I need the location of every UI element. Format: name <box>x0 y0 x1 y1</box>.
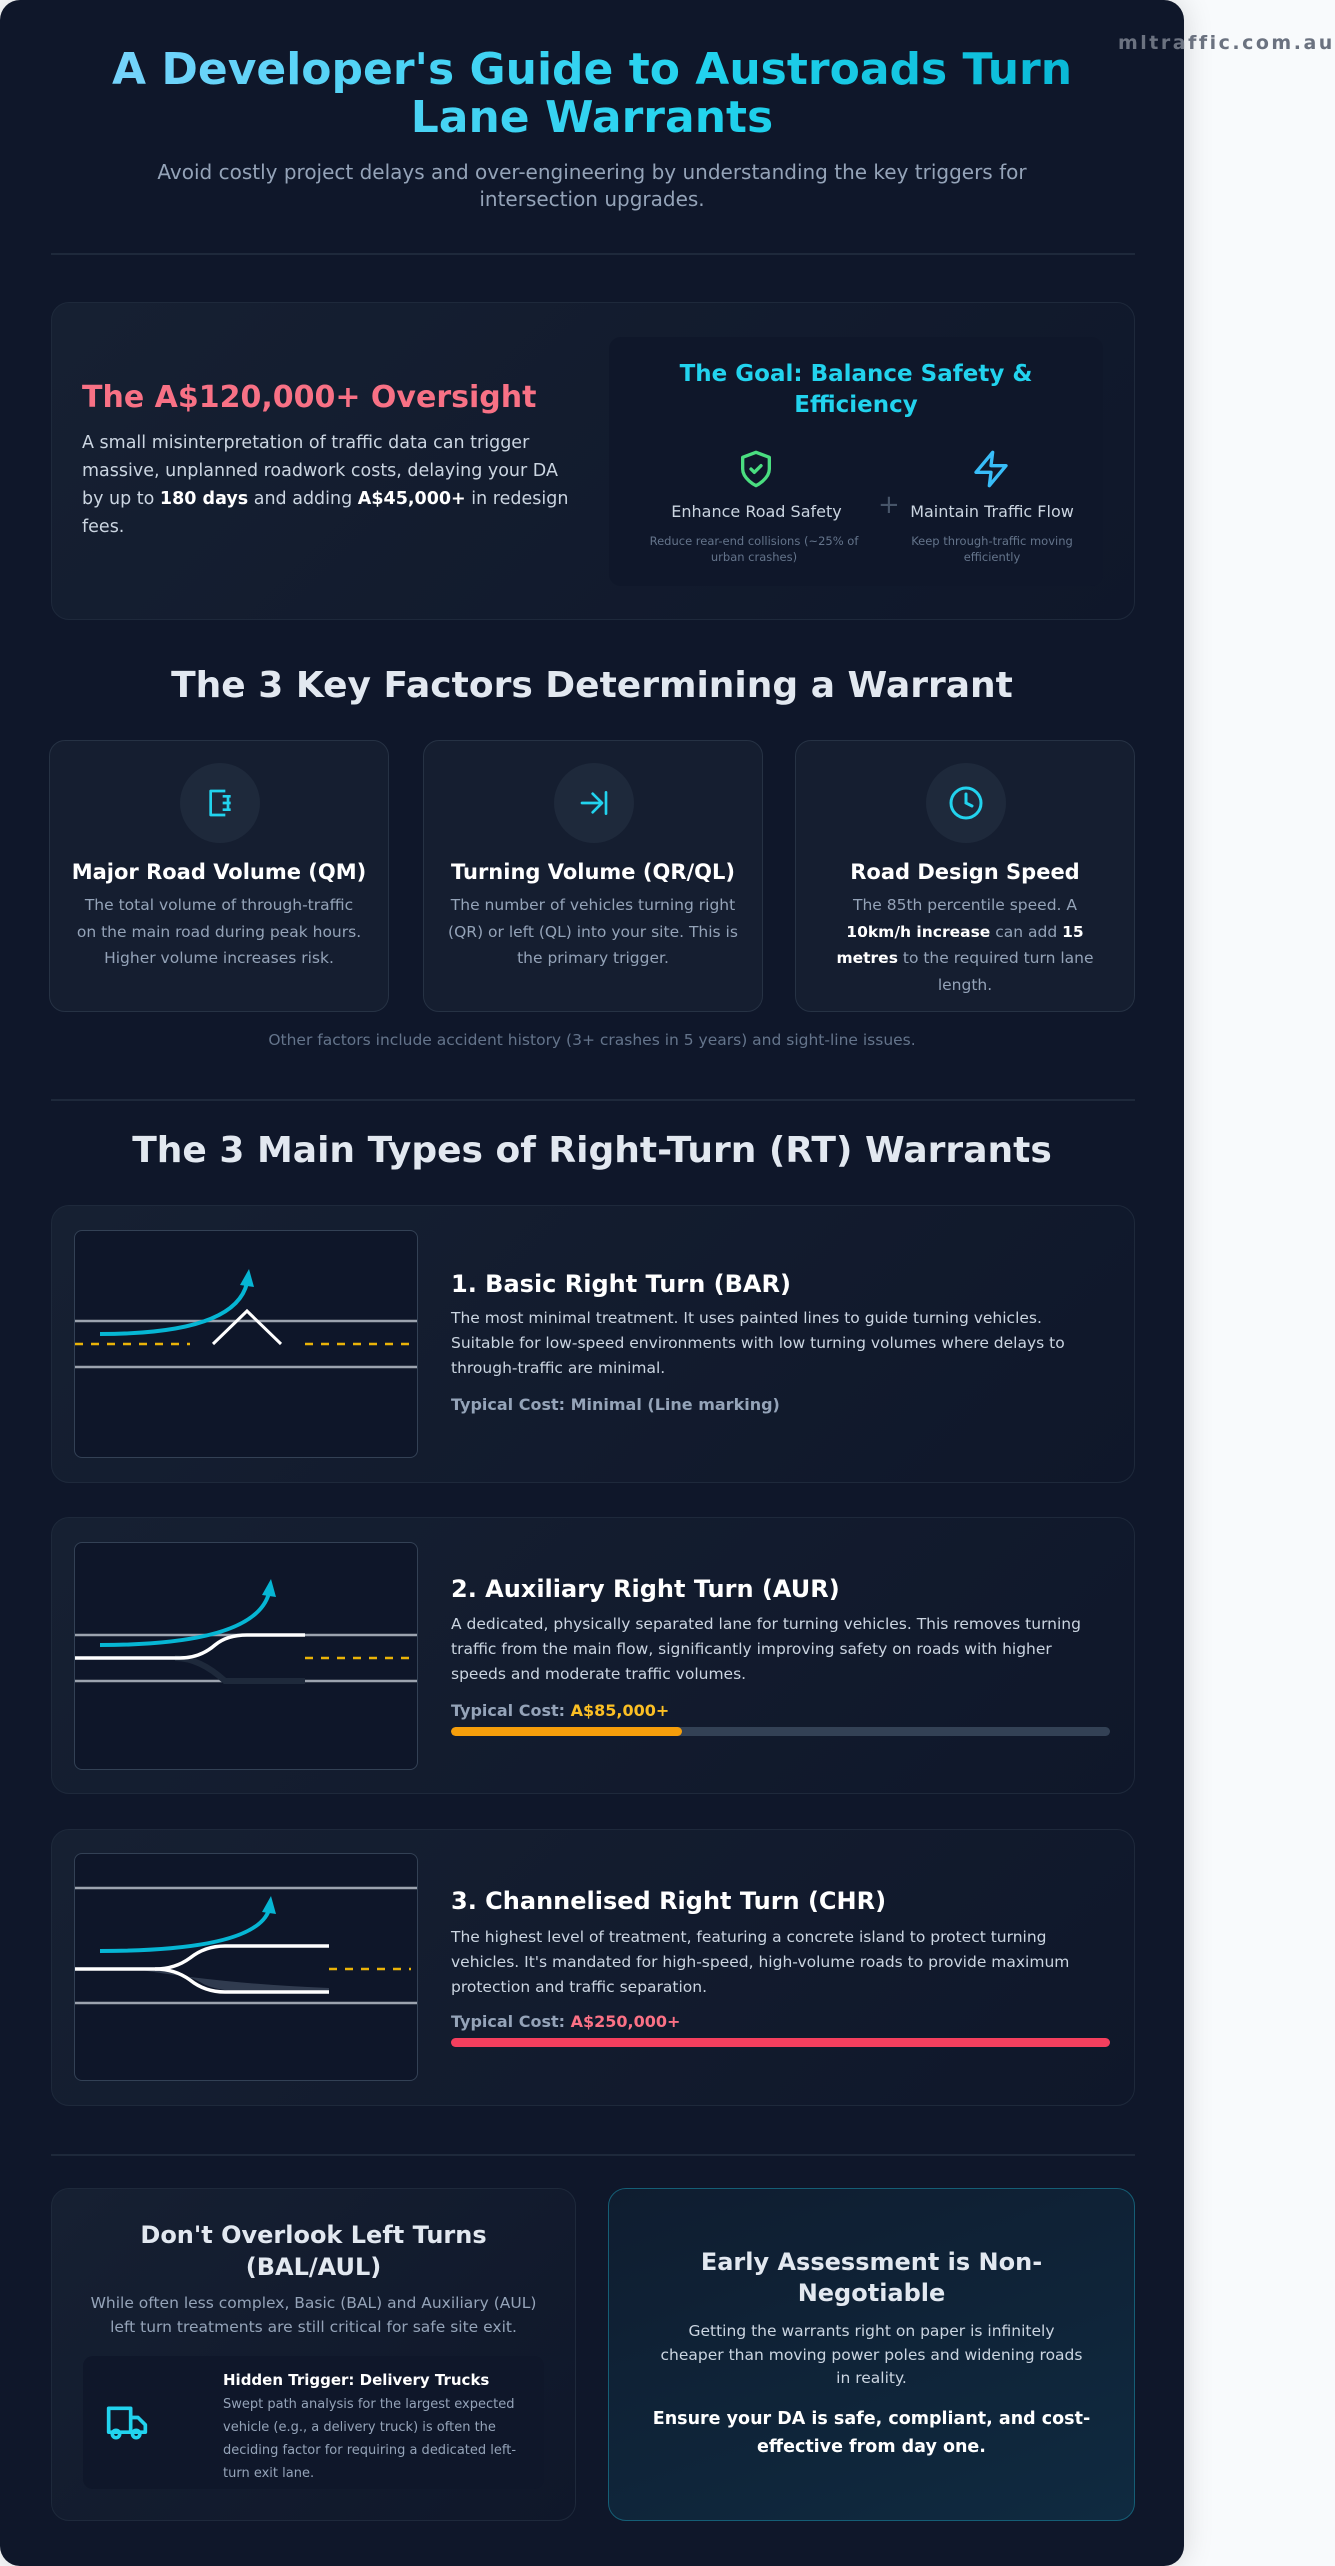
plus: + <box>878 490 900 520</box>
factor card: design speed: The 85th percentile speed. A 10km/h increase can add 15 metres to the required turn lane length. <box>836 896 1094 994</box>
panel: BAR <box>51 1205 1135 1483</box>
call to action: Ensure your DA is safe, compliant, and cost-effective from day one. <box>653 2409 1090 2457</box>
icon: bolt <box>974 450 1008 488</box>
main card: The most minimal treatment. It uses painted lines to guide turning vehicles. Suitable for low-speed environments with low turning volumes where delays to through-traffic are minimal. <box>451 1309 1065 1377</box>
goal heading: Efficiency <box>794 392 918 418</box>
factor card: turning volume: The number of vehicles turning right (QR) or left (QL) into your site. This is the primary trigger. <box>448 896 738 967</box>
diagram: AUR <box>74 1542 418 1770</box>
note: Other factors include accident history (3+ crashes in 5 years) and sight-line issues. <box>268 1031 916 1049</box>
assessment heading: Negotiable <box>798 2279 945 2307</box>
flow note: Keep through-traffic moving efficiently <box>911 534 1073 564</box>
heading: key factors: The 3 Key Factors Determining a Warrant <box>171 665 1013 706</box>
safety note: Reduce rear-end collisions (~25% of urban crashes) <box>650 534 858 564</box>
panel: AUR <box>51 1517 1135 1794</box>
assessment text: Getting the warrants right on paper is infinitely cheaper than moving power poles and widening roads in reality. <box>661 2322 1082 2387</box>
icon: clock <box>926 763 1006 843</box>
main card: The highest level of treatment, featuring a concrete island to protect turning vehicles. It's mandated for high-speed, high-volume roads to provide maximum protection and traffic separation. <box>451 1928 1069 1996</box>
panel: oversight and goal <box>51 302 1135 620</box>
hidden trigger box <box>83 2356 544 2489</box>
heading: RT warrants: The 3 Main Types of Right-Turn (RT) Warrants <box>132 1130 1052 1171</box>
title: A Developer's Guide to Austroads Turn <box>112 44 1072 95</box>
left turns heading: Don't Overlook Left Turns <box>140 2221 487 2249</box>
safety label: Enhance Road Safety <box>671 502 842 521</box>
factor card: turning volume: Turning Volume (QR/QL) <box>451 860 735 884</box>
title <box>60 46 1124 142</box>
left turns heading: (BAL/AUL) <box>246 2253 381 2281</box>
panel: left turns <box>51 2188 576 2521</box>
trigger title: Hidden Trigger: Delivery Trucks <box>223 2371 489 2389</box>
title: Lane Warrants <box>411 92 773 143</box>
panel: early assessment <box>608 2188 1135 2521</box>
main card: Typical Cost: A$85,000+ <box>451 1701 669 1720</box>
main card: Typical Cost: Minimal (Line marking) <box>451 1395 780 1414</box>
text: CHR: 3. Channelised Right Turn (CHR) <box>451 1887 886 1915</box>
factor card: major road volume <box>49 740 389 1012</box>
subtitle: Avoid costly project delays and over-engineering by understanding the key triggers for intersection upgrades. <box>157 160 1027 211</box>
goal box <box>609 337 1103 586</box>
icon: arrow to line <box>554 763 634 843</box>
goal heading: The Goal: Balance Safety & <box>680 361 1032 387</box>
assessment heading: Early Assessment is Non- <box>701 2248 1042 2276</box>
watermark: mltraffic.com.au <box>1118 32 1335 54</box>
factor card: major road volume: The total volume of through-traffic on the main road during peak hours. Higher volume increases risk. <box>77 896 361 967</box>
cost bar: AUR <box>451 1727 1110 1736</box>
oversight heading: The A$120,000+ Oversight <box>82 380 536 415</box>
factor card: design speed: Road Design Speed <box>850 860 1080 884</box>
icon: entry <box>180 763 260 843</box>
assessment heading <box>701 2248 1042 2307</box>
panel: CHR <box>51 1829 1135 2106</box>
trigger text: Swept path analysis for the largest expected vehicle (e.g., a delivery truck) is often the deciding factor for requiring a dedicated left-turn exit lane. <box>223 2397 516 2481</box>
factor card: major road volume: Major Road Volume (QM) <box>72 860 366 884</box>
factor card: design speed <box>795 740 1135 1012</box>
flow label: Maintain Traffic Flow <box>910 502 1074 521</box>
diagram: BAR <box>74 1230 418 1458</box>
text: AUR: 2. Auxiliary Right Turn (AUR) <box>451 1575 840 1603</box>
icon: truck <box>106 2406 148 2440</box>
oversight text: A small misinterpretation of traffic data can trigger massive, unplanned roadwork costs, delaying your DA by up to 180 days and adding A$45,000+ in redesign fees. <box>82 433 568 537</box>
icon: shield <box>741 450 771 488</box>
factor card: turning volume <box>423 740 763 1012</box>
text: BAR: 1. Basic Right Turn (BAR) <box>451 1270 791 1298</box>
cost bar: CHR <box>451 2038 1110 2047</box>
main card: Typical Cost: A$250,000+ <box>451 2012 680 2031</box>
main card: A dedicated, physically separated lane for turning vehicles. This removes turning traffic from the main flow, significantly improving safety on roads with higher speeds and moderate traffic volumes. <box>451 1615 1081 1683</box>
diagram: CHR <box>74 1853 418 2081</box>
left turns heading <box>140 2221 487 2281</box>
goal heading <box>680 361 1032 418</box>
left turns text: While often less complex, Basic (BAL) and Auxiliary (AUL) left turn treatments are still critical for safe site exit. <box>91 2294 536 2336</box>
